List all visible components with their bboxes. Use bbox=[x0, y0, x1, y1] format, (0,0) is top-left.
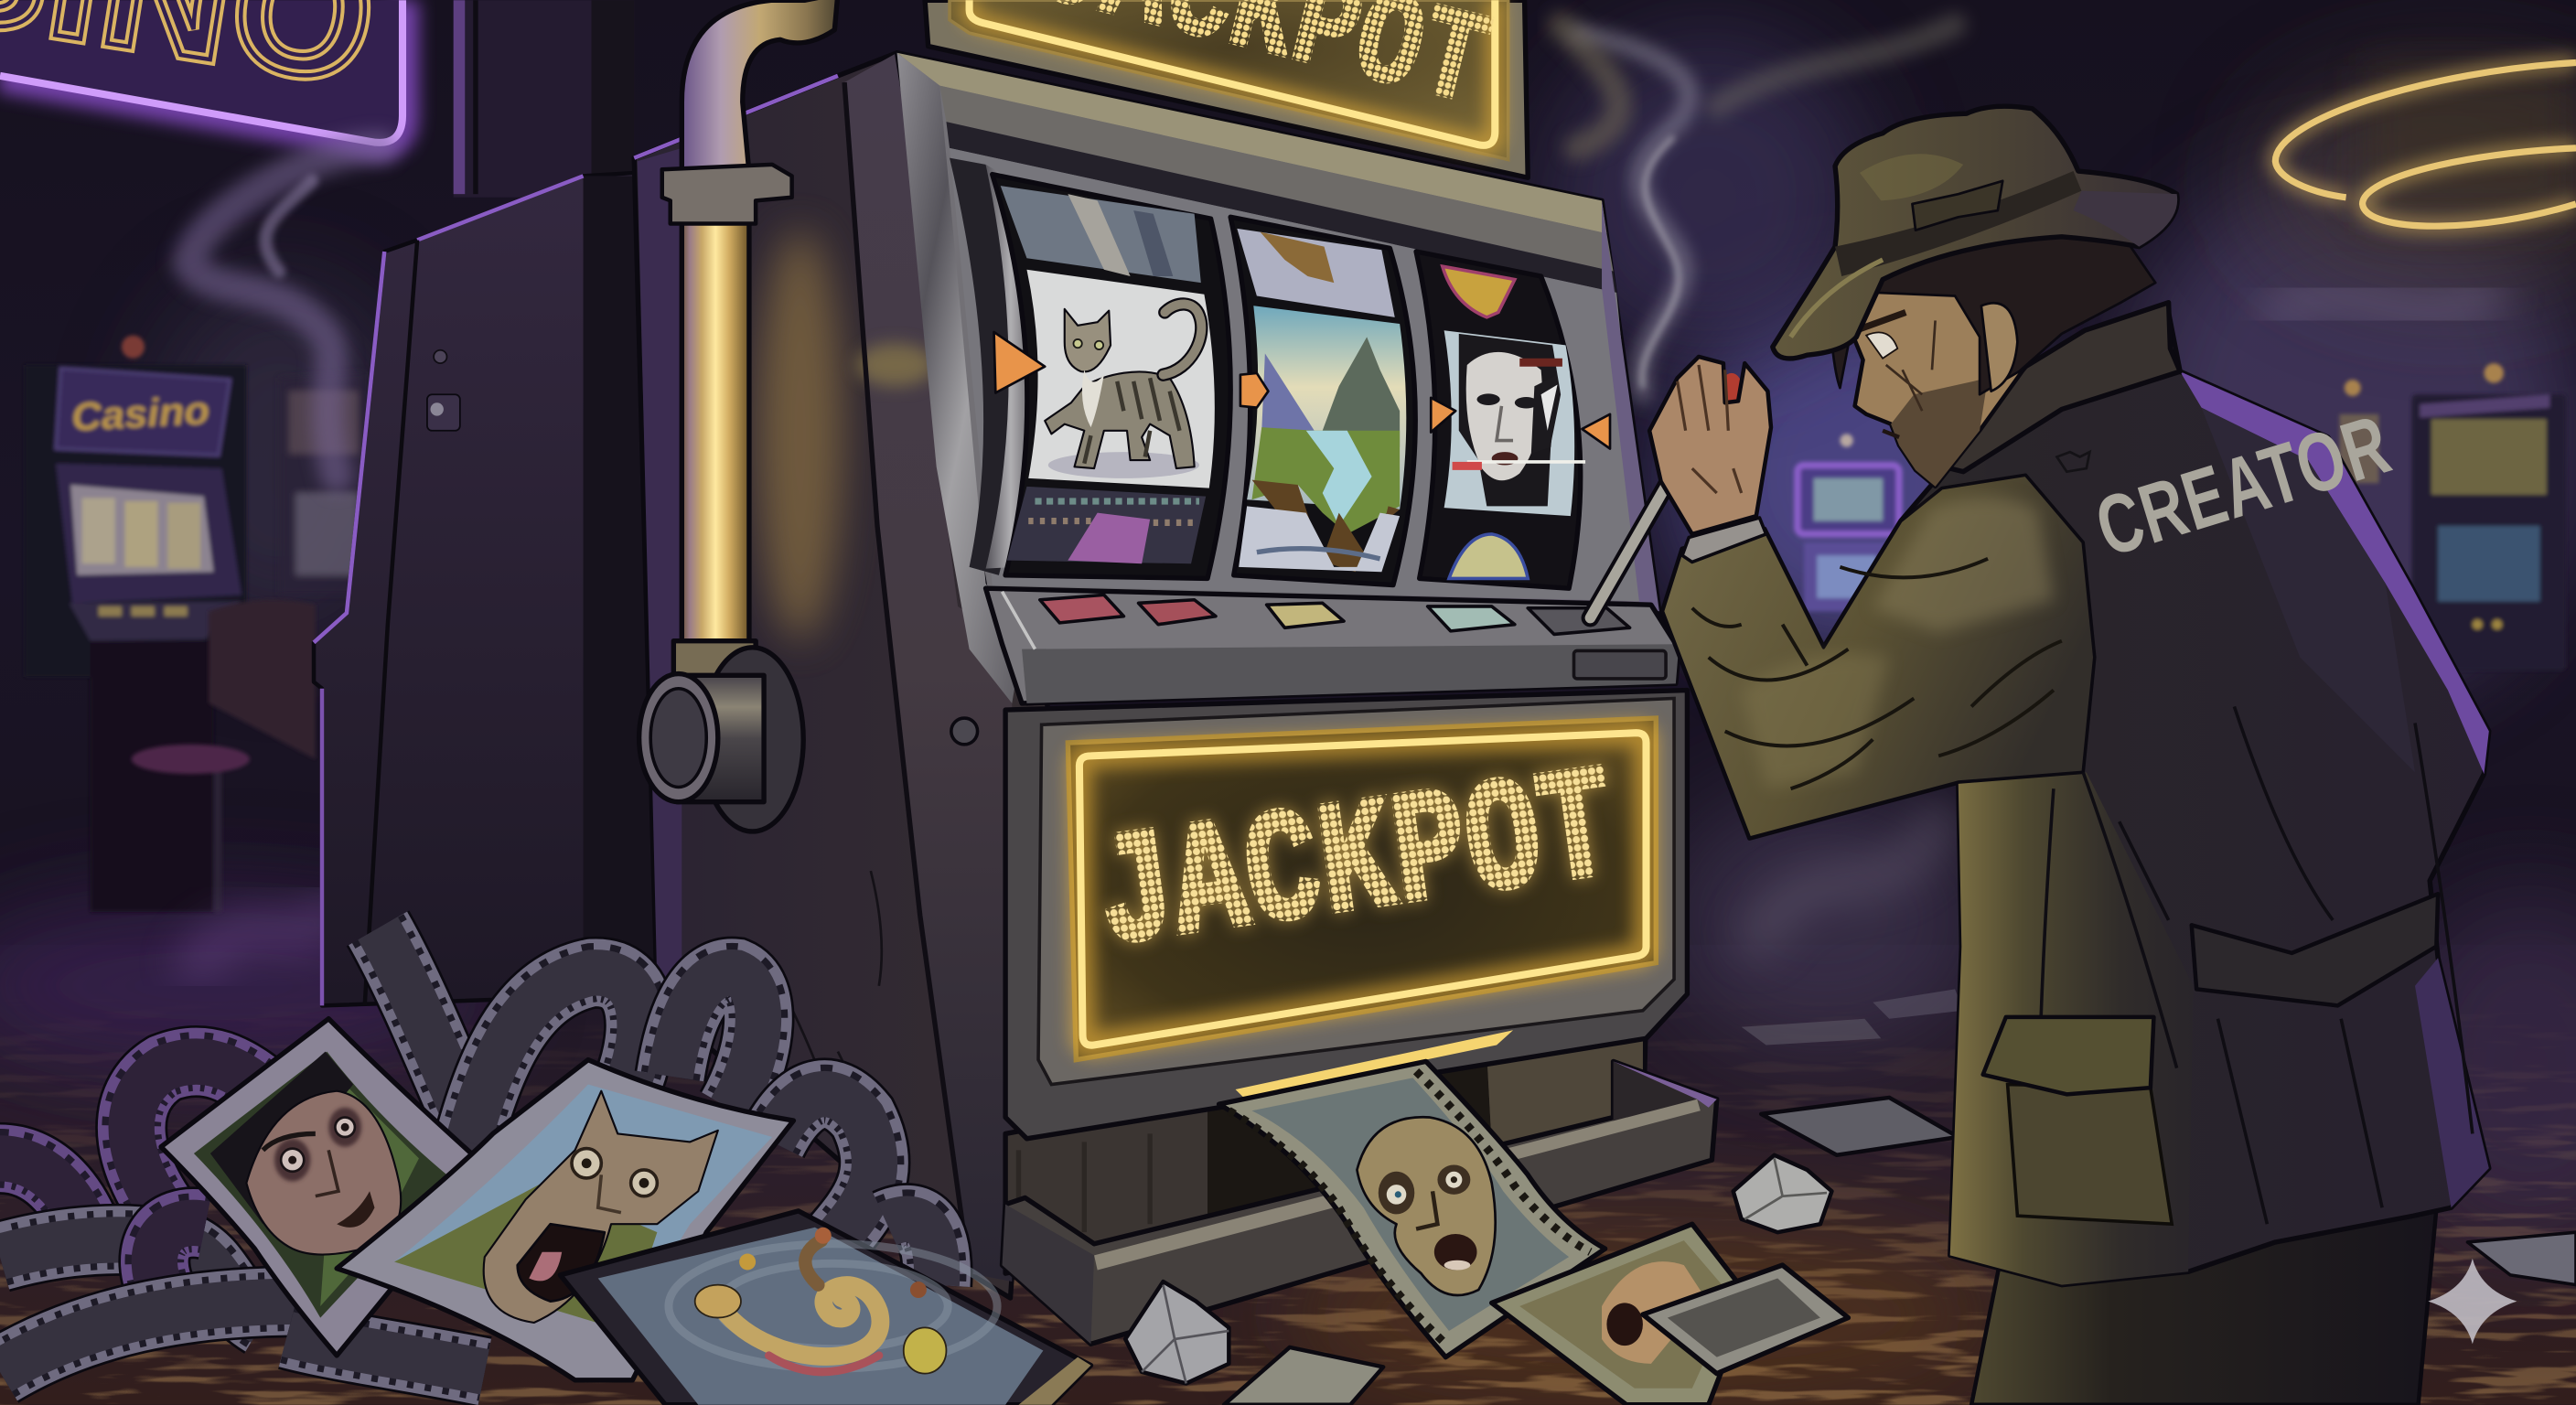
grey overlapping photo bbox=[1643, 1265, 1848, 1374]
coat collar bbox=[1937, 303, 2180, 472]
panel: melting landscape tile bbox=[1247, 306, 1406, 572]
machine base bbox=[1005, 1015, 1647, 1273]
paper on floor bottom bbox=[1224, 1347, 1383, 1405]
panel: glitched top tile bbox=[1001, 186, 1201, 283]
ear bbox=[1981, 303, 2017, 391]
panel: glitched icon bbox=[1443, 266, 1515, 317]
olive sleeve bbox=[1662, 475, 2095, 838]
creator lettering: CREATOR bbox=[2086, 397, 2400, 574]
slot machine cabinet bbox=[634, 53, 1717, 1344]
fedora hat bbox=[1773, 106, 2177, 359]
loose photos bbox=[1224, 989, 2576, 1405]
stitched emblem bbox=[2056, 452, 2089, 472]
casino stool bbox=[132, 599, 316, 912]
distant slot machine dim bbox=[279, 371, 365, 595]
coat belt bbox=[2192, 894, 2438, 1005]
photo: screaming cat monster bbox=[337, 1060, 793, 1380]
crumpled paper balls bbox=[1125, 1155, 1831, 1383]
yellow button bbox=[1267, 603, 1344, 627]
coat pocket bbox=[1983, 1017, 2172, 1224]
red button bbox=[1040, 595, 1123, 623]
paper on floor right bbox=[1761, 1098, 1959, 1155]
sparkle watermark bbox=[2428, 1259, 2517, 1344]
film strip emerging with zombie portrait bbox=[1219, 1061, 1605, 1357]
spiral blob bbox=[723, 1240, 880, 1372]
hair bbox=[1830, 231, 2155, 394]
paper corner far right bbox=[2467, 1232, 2576, 1285]
reel two bbox=[1230, 217, 1415, 585]
reel three bbox=[1416, 252, 1585, 588]
purple rim light bbox=[2180, 371, 2489, 774]
red button bbox=[1139, 600, 1216, 625]
lower display panel: JACKPOT bbox=[1087, 738, 1626, 992]
coin slot bbox=[1573, 650, 1666, 679]
panel: glitched lower tile bbox=[1449, 534, 1528, 578]
panel: glitched bottom tile bbox=[1007, 487, 1206, 563]
upper machine face bbox=[897, 53, 1684, 703]
creator figure bbox=[1590, 106, 2489, 1405]
panel: glitched portrait tile bbox=[1444, 330, 1585, 516]
lever base bbox=[1528, 608, 1630, 634]
head and face bbox=[1830, 231, 2155, 487]
smoke wisps bbox=[189, 25, 2481, 961]
coat front lit panel bbox=[1950, 772, 2194, 1285]
photo: distorted woman portrait bbox=[161, 1019, 489, 1356]
teal button bbox=[1428, 606, 1515, 631]
lower display panel bbox=[1005, 691, 1687, 1139]
ceiling ring lights bbox=[2275, 62, 2576, 226]
cabinet side panel bbox=[634, 53, 1051, 1298]
dot matrix jackpot text: JACKPOT bbox=[1087, 738, 1626, 992]
coat creases bbox=[2037, 706, 2473, 1224]
shirt cuff bbox=[1682, 518, 1766, 562]
long coat body bbox=[1662, 312, 2489, 1285]
distant slot machine left: Casino bbox=[70, 389, 210, 440]
panel: tabby cat tile bbox=[1026, 270, 1215, 488]
reel one bbox=[993, 175, 1230, 578]
rear cabinet bbox=[314, 173, 657, 1005]
panel: melted top tile bbox=[1237, 229, 1395, 317]
payout tray bbox=[1003, 1061, 1717, 1344]
prize chute glow bbox=[1236, 1030, 1513, 1098]
distant slot machines right bbox=[1798, 363, 2566, 670]
panel: melted bottom tile bbox=[1239, 506, 1400, 572]
distant slot machine left bbox=[25, 336, 246, 912]
payline arrows bbox=[994, 332, 1610, 449]
film strip pile bbox=[0, 928, 1090, 1405]
lever arm with glowing pipe bbox=[639, 0, 838, 831]
control ledge bbox=[986, 588, 1679, 703]
trousers bbox=[1971, 1191, 2438, 1405]
hand on lever bbox=[1590, 357, 1771, 618]
tablet with spiral artwork bbox=[560, 1211, 1090, 1405]
